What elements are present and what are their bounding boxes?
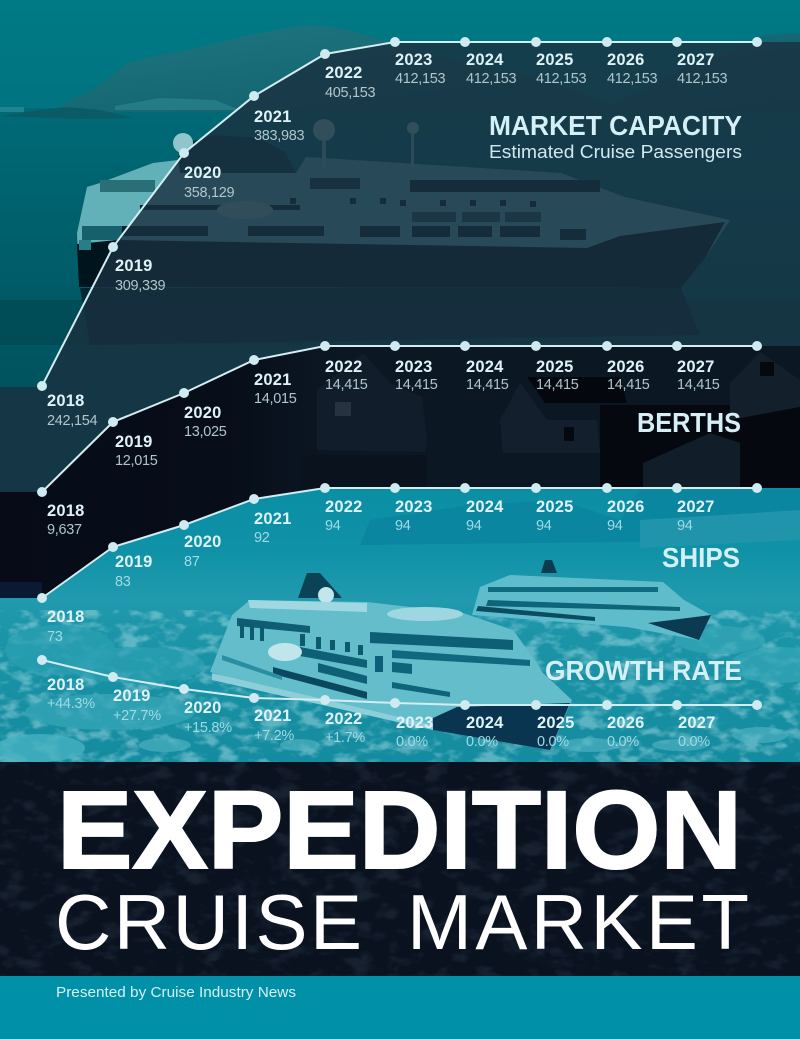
- chart: berths line: 14,015: [254, 391, 297, 407]
- chart: berths line: 9,637: [47, 522, 82, 538]
- heading: growth rate: GROWTH RATE: [545, 655, 742, 686]
- chart: berths line: 2026: [607, 358, 645, 376]
- footer credit: Presented by Cruise Industry News: [56, 984, 296, 1001]
- chart: market capacity line: 2024: [466, 51, 504, 69]
- chart: market capacity line: 358,129: [184, 185, 235, 201]
- chart: market capacity line: 383,983: [254, 128, 305, 144]
- chart: ships line: 2023: [395, 498, 433, 516]
- chart: growth rate line: [37, 655, 762, 750]
- chart: berths line: 14,415: [607, 377, 650, 393]
- chart: ships line: 2021: [254, 510, 292, 528]
- chart: berths line: 2025: [536, 358, 574, 376]
- chart: ships line: 2026: [607, 498, 645, 516]
- chart: ships line: 2024: [466, 498, 504, 516]
- chart: ships line: 73: [47, 629, 63, 645]
- footer band: [0, 976, 800, 1039]
- chart: growth rate line: 0.0%: [607, 734, 639, 750]
- panel: berths area with harbour houses: [0, 346, 800, 600]
- chart: ships line: 94: [395, 518, 411, 534]
- chart: market capacity line: 412,153: [677, 71, 728, 87]
- chart: growth rate line: 0.0%: [537, 734, 569, 750]
- heading: ships: SHIPS: [662, 542, 740, 573]
- title: expedition: EXPEDITION: [57, 769, 742, 892]
- illustration: foreground cruise ship in ice: [210, 573, 572, 750]
- chart: ships line: 2027: [677, 498, 715, 516]
- chart: market capacity line: 2020: [184, 164, 222, 182]
- chart: market capacity line: 405,153: [325, 85, 376, 101]
- title: cruise market: CRUISE: [55, 878, 362, 966]
- chart: growth rate line: 2025: [537, 714, 575, 732]
- chart: berths line: 14,415: [677, 377, 720, 393]
- title: cruise market: MARKET: [407, 878, 749, 966]
- chart: market capacity line: 242,154: [47, 413, 98, 429]
- chart: market capacity line: 2026: [607, 51, 645, 69]
- chart: growth rate line: +1.7%: [325, 730, 365, 746]
- chart: growth rate line: 2026: [607, 714, 645, 732]
- chart: growth rate line: 0.0%: [396, 734, 428, 750]
- chart: growth rate line: 2024: [466, 714, 504, 732]
- chart: market capacity line: 2019: [115, 257, 153, 275]
- texture: ice floes in lower panel: [139, 727, 788, 752]
- chart: ships line: 92: [254, 530, 270, 546]
- illustration: distant cruise ship in ice: [472, 560, 711, 640]
- chart: market capacity line: [37, 37, 762, 429]
- chart: ships line: 94: [325, 518, 341, 534]
- chart: growth rate line: +27.7%: [113, 708, 161, 724]
- photo: Arctic fjord with expedition ship: [0, 0, 800, 500]
- chart: berths line: 13,025: [184, 424, 227, 440]
- title: cruise market: [55, 878, 749, 966]
- chart: berths line: 14,415: [466, 377, 509, 393]
- chart: ships line: 2022: [325, 498, 363, 516]
- chart: market capacity line: 309,339: [115, 278, 166, 294]
- chart: berths line: 2018: [47, 502, 85, 520]
- chart: growth rate line: 2022: [325, 710, 363, 728]
- chart: market capacity line: 412,153: [466, 71, 517, 87]
- chart: ships line: [37, 483, 762, 645]
- chart: market capacity line: 2021: [254, 108, 292, 126]
- chart: growth rate line: 2023: [396, 714, 434, 732]
- chart: ships line: 94: [466, 518, 482, 534]
- chart: berths line: 2022: [325, 358, 363, 376]
- chart: market capacity line: 2025: [536, 51, 574, 69]
- chart: ships line: 94: [677, 518, 693, 534]
- chart: ships line: 94: [536, 518, 552, 534]
- heading: market capacity: MARKET CAPACITY: [489, 110, 742, 141]
- chart: growth rate line: +15.8%: [184, 720, 232, 736]
- chart: berths line: 2020: [184, 404, 222, 422]
- chart: market capacity line: 412,153: [395, 71, 446, 87]
- chart: berths line: 2024: [466, 358, 504, 376]
- subheading: estimated cruise passengers: Estimated Cruise Passengers: [489, 142, 742, 162]
- panel: market capacity dark area: [0, 42, 800, 500]
- chart: ships line: 2018: [47, 608, 85, 626]
- chart: berths line: 12,015: [115, 453, 158, 469]
- panel: ships area with ice field: [0, 480, 800, 765]
- chart: ships line: 83: [115, 574, 131, 590]
- chart: ships line: 2025: [536, 498, 574, 516]
- chart: growth rate line: +7.2%: [254, 728, 294, 744]
- chart: market capacity line: 2027: [677, 51, 715, 69]
- chart: growth rate line: +44.3%: [47, 696, 95, 712]
- chart: ships line: 2020: [184, 533, 222, 551]
- chart: berths line: 2023: [395, 358, 433, 376]
- chart: berths line: [37, 341, 762, 538]
- chart: growth rate line: 2019: [113, 687, 151, 705]
- chart: growth rate line: 2027: [678, 714, 716, 732]
- chart: berths line: 2019: [115, 433, 153, 451]
- chart: market capacity line: 2018: [47, 392, 85, 410]
- bottom title band: [0, 762, 800, 977]
- chart: growth rate line: 0.0%: [466, 734, 498, 750]
- chart: growth rate line: 0.0%: [678, 734, 710, 750]
- chart: ships line: 87: [184, 554, 200, 570]
- heading: berths: BERTHS: [637, 407, 741, 438]
- chart: market capacity line: 412,153: [607, 71, 658, 87]
- chart: berths line: 14,415: [536, 377, 579, 393]
- chart: growth rate line: 2020: [184, 699, 222, 717]
- texture: faint ice under title: [0, 762, 800, 976]
- chart: market capacity line: 412,153: [536, 71, 587, 87]
- chart: growth rate line: 2018: [47, 676, 85, 694]
- chart: ships line: 94: [607, 518, 623, 534]
- chart: berths line: 14,415: [395, 377, 438, 393]
- chart: market capacity line: 2022: [325, 64, 363, 82]
- chart: berths line: 2027: [677, 358, 715, 376]
- chart: berths line: 14,415: [325, 377, 368, 393]
- chart: berths line: 2021: [254, 371, 292, 389]
- chart: growth rate line: 2021: [254, 707, 292, 725]
- chart: ships line: 2019: [115, 553, 153, 571]
- chart: market capacity line: 2023: [395, 51, 433, 69]
